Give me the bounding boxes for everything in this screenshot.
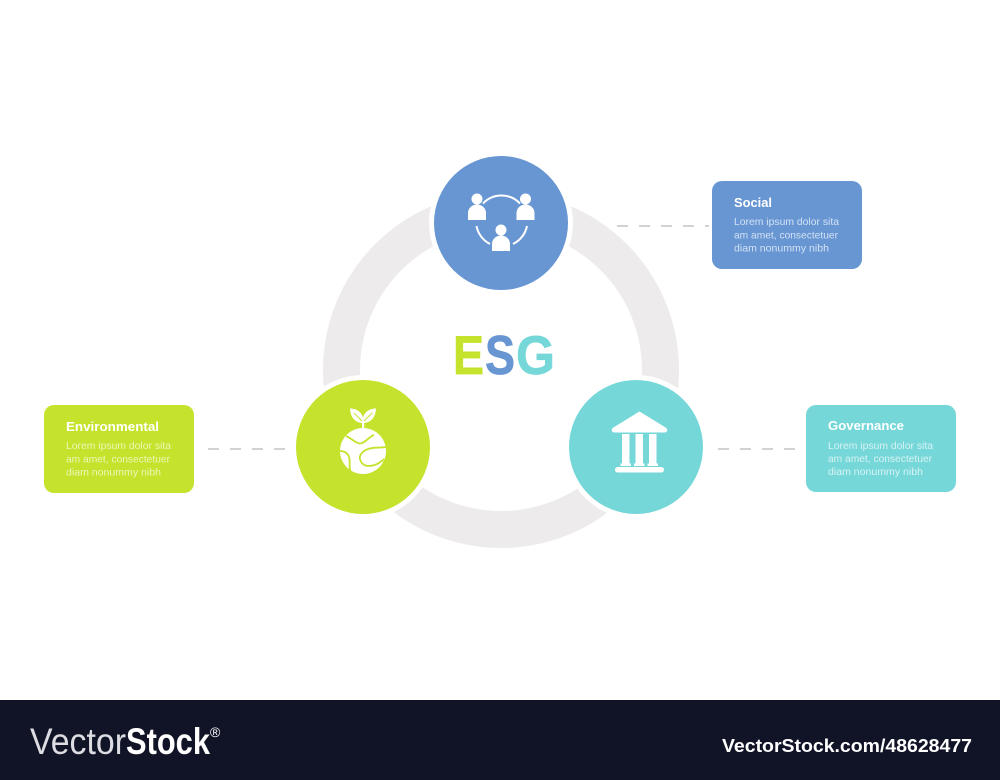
footer logo: ® — [210, 724, 221, 740]
ESG title: G — [516, 324, 555, 386]
card: governance: Governance — [828, 419, 904, 433]
card: social: Lorem ipsum dolor sita — [734, 216, 839, 228]
connector: governance — [718, 448, 797, 450]
card: environmental: diam nonummy nibh — [66, 466, 161, 478]
footer logo: Stock — [126, 721, 210, 762]
card: environmental — [44, 405, 194, 493]
card: governance: diam nonummy nibh — [828, 466, 923, 478]
icon: globe with sprout — [340, 408, 386, 474]
footer logo: Vector — [30, 721, 126, 762]
card: environmental: Lorem ipsum dolor sita — [66, 440, 171, 452]
node: social — [429, 151, 573, 295]
ESG title — [453, 324, 555, 386]
footer bar — [0, 700, 1000, 780]
card: social: am amet, consectetuer — [734, 230, 838, 242]
connector: social — [617, 225, 709, 227]
card: social — [712, 181, 862, 269]
node: governance — [564, 375, 708, 519]
card: social: Social — [734, 196, 772, 210]
footer logo — [30, 721, 221, 762]
card: environmental: am amet, consectetuer — [66, 454, 170, 466]
card: environmental: Environmental — [66, 420, 159, 434]
icon: classical building — [612, 412, 667, 472]
ESG title: S — [485, 324, 515, 386]
card: governance — [806, 405, 956, 492]
connector: environmental — [208, 448, 287, 450]
node: environmental — [291, 375, 435, 519]
footer url: VectorStock.com/48628477 — [722, 736, 972, 756]
icon: people circle — [468, 194, 534, 251]
ESG title: E — [453, 324, 484, 386]
card: social: diam nonummy nibh — [734, 242, 829, 254]
card: governance: Lorem ipsum dolor sita — [828, 440, 933, 452]
card: governance: am amet, consectetuer — [828, 453, 932, 465]
ring — [342, 210, 660, 530]
